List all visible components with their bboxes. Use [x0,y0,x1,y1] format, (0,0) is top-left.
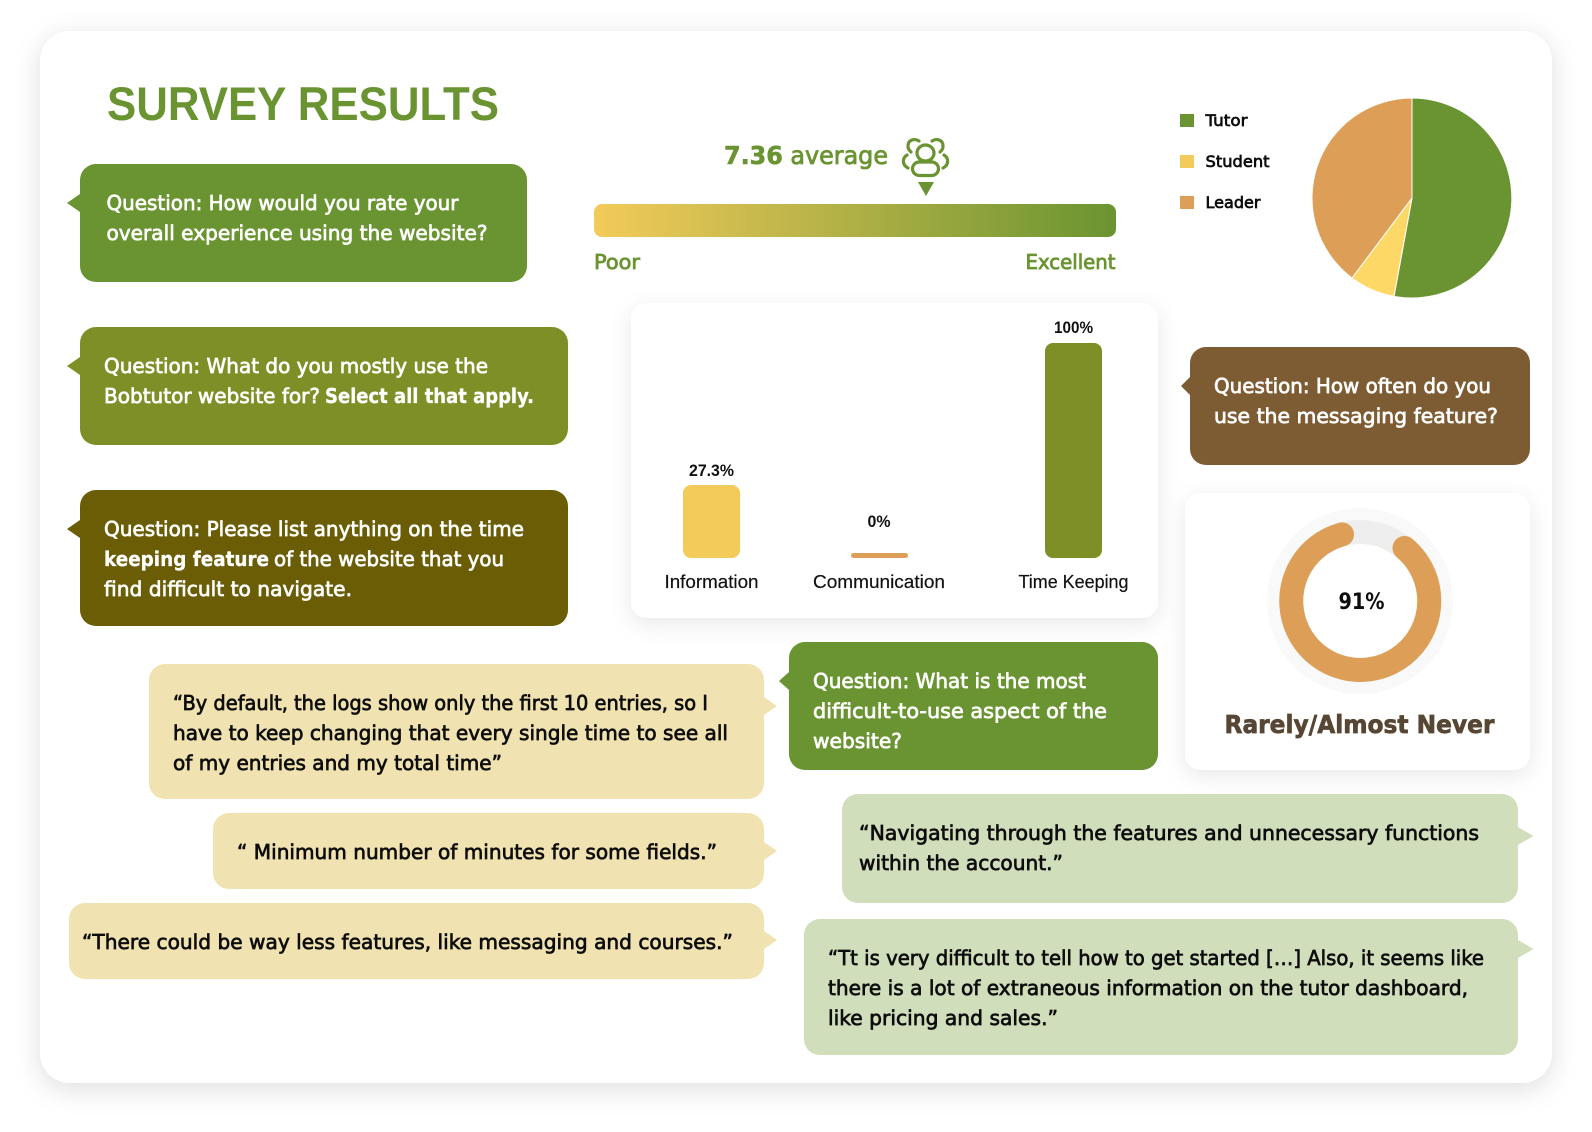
average label: 7.36 average [724,141,888,170]
scale label: poor: Poor [594,250,641,274]
legend: respondent roles: Leader [1206,193,1261,212]
callout: website usage question: Question: What do you mostly use the [104,354,488,378]
quote: minimum minutes: “ Minimum number of minutes for some fields.” [237,840,717,864]
callout: most difficult aspect question: Question: What is the most [813,669,1086,693]
callout: most difficult aspect question: difficult-to-use aspect of the [813,699,1107,723]
donut chart: 91 percent [1273,514,1447,688]
donut caption: Rarely/Almost Never [1224,710,1495,739]
quote: log entries [149,664,777,799]
legend: respondent roles: Tutor [1204,111,1248,130]
quote: log entries: have to keep changing that every single time to see all [173,721,728,745]
bar: time keeping [1018,319,1128,592]
callout: most difficult aspect question: website? [813,729,902,753]
panel: messaging frequency donut [1185,493,1530,770]
panel: usage bar chart [631,303,1158,618]
callout: overall experience question: overall experience using the website? [106,221,488,245]
quote: navigating features: “Navigating through the features and unnecessary functions [859,821,1479,845]
callout: messaging question: use the messaging feature? [1214,404,1498,428]
legend: respondent roles [1180,111,1270,212]
callout: website usage question: Select all that apply. [325,384,534,408]
bar: communication: Communication [813,572,945,592]
rating scale [594,140,1116,274]
bar: information: Information [664,572,758,592]
bar: communication [813,513,945,592]
donut value: 91% [1338,590,1384,615]
quote: getting started: “Tt is very difficult to tell how to get started […] Also, it seems like [828,946,1484,970]
bar: communication: 0% [868,513,891,531]
gradient bar [594,204,1116,237]
quote: getting started [804,919,1534,1055]
callout: website usage question: Bobtutor website for? [104,384,320,408]
callout: messaging question: Question: How often do you [1214,374,1491,398]
bar: time keeping: Time Keeping [1018,572,1128,592]
bar: information [664,462,758,592]
quote: fewer features: “There could be way less features, like messaging and courses.” [82,930,733,954]
bar: information: 27.3% [689,462,734,480]
icon: group of people [903,140,948,176]
callout: overall experience question: Question: How would you rate your [106,191,459,215]
callout: time keeping question: keeping feature [104,547,269,571]
legend: respondent roles: Student [1206,152,1270,171]
callout: website usage question [67,327,568,445]
quote: navigating features: within the account.” [859,851,1063,875]
quote: getting started: like pricing and sales.” [828,1006,1058,1030]
quote: log entries: of my entries and my total time” [173,751,502,775]
quote: getting started: there is a lot of extraneous information on the tutor dashboard, [828,976,1468,1000]
marker triangle [918,182,934,196]
quote: minimum minutes [213,813,777,889]
title: SURVEY RESULTS [107,77,499,130]
callout: most difficult aspect question [779,642,1158,770]
quote: log entries: “By default, the logs show only the first 10 entries, so I [173,691,708,715]
callout: messaging question [1181,347,1530,465]
callout: time keeping question: Question: Please list anything on the time [104,517,524,541]
bar: time keeping: 100% [1054,319,1093,337]
callout: time keeping question: find difficult to navigate. [104,577,352,601]
callout: overall experience question [67,164,527,282]
callout: time keeping question [67,490,568,626]
quote: fewer features [69,903,777,979]
quote: navigating features [842,794,1534,903]
pie chart: respondent roles [1312,98,1512,298]
scale label: excellent: Excellent [1026,250,1116,274]
callout: time keeping question: of the website that you [274,547,504,571]
